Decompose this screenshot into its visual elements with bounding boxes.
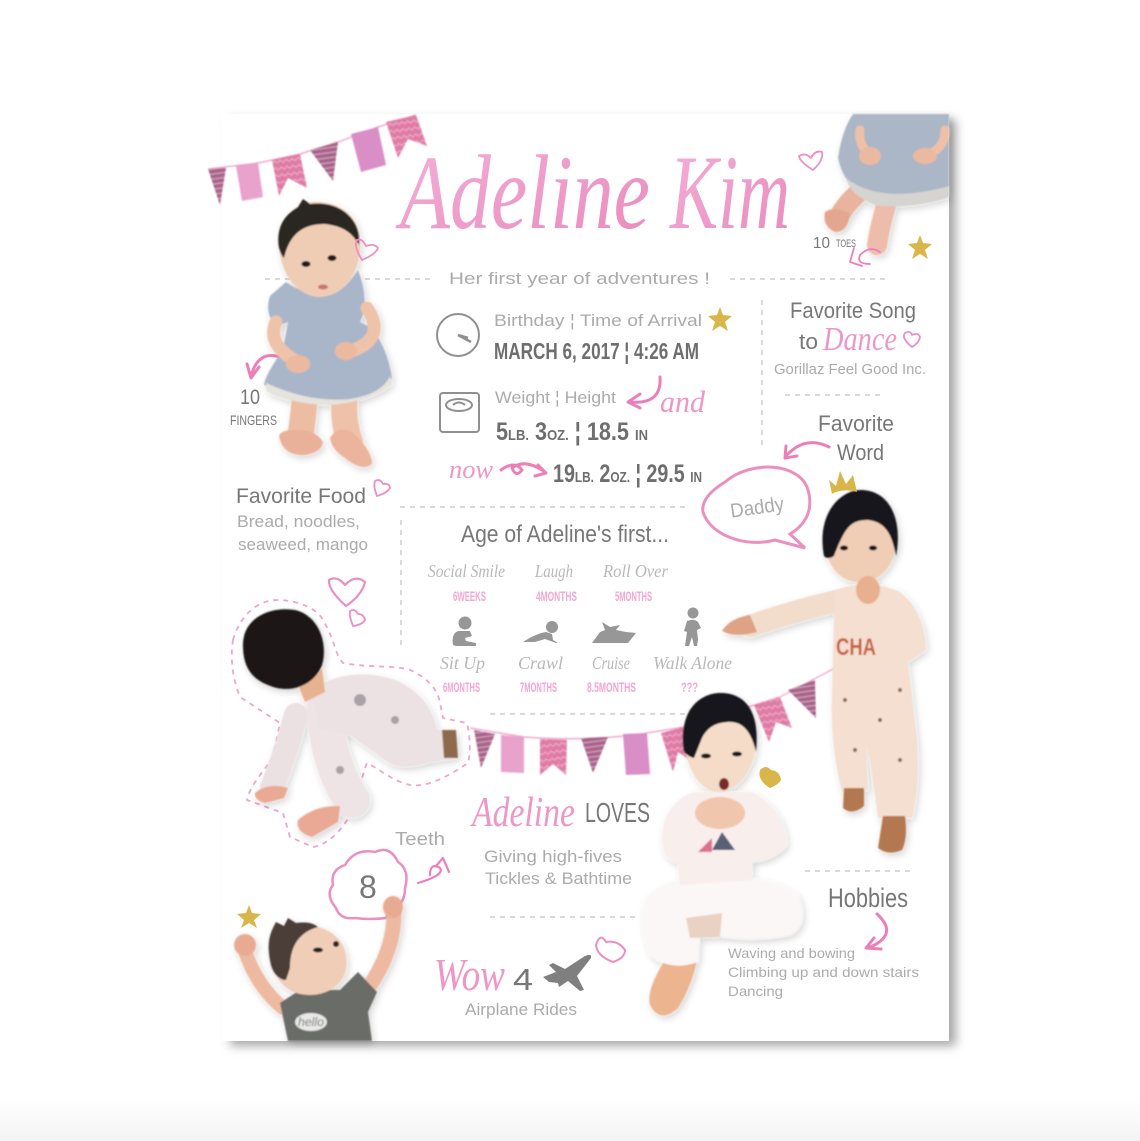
- icon: small heart left: [350, 610, 365, 626]
- favorite word: [818, 411, 894, 465]
- teeth cloud: 8: [359, 869, 377, 905]
- arrow: teeth: [418, 858, 449, 883]
- icon: heart food: [374, 480, 390, 496]
- hobbies list: [728, 945, 919, 999]
- arrow: to and: [628, 377, 660, 408]
- poster shadow: [230, 120, 956, 1046]
- title: Adeline: [395, 134, 650, 251]
- favorite song: Gorillaz Feel Good Inc.: [774, 361, 926, 378]
- milestones row 2: 8.5MONTHS: [587, 679, 636, 695]
- photo: baby with arms raised: [234, 896, 403, 1041]
- birth details: [494, 311, 702, 364]
- current weight: 19LB. 2OZ. ¦ 29.5 IN: [553, 460, 702, 488]
- adeline loves: LOVES: [585, 797, 650, 828]
- icon: scale: [440, 393, 479, 432]
- milestones row 1: Roll Over: [602, 561, 669, 581]
- arrow: fingers: [247, 356, 280, 378]
- photo: standing baby with crown: [722, 490, 926, 853]
- icon: sit up: [453, 616, 476, 646]
- poster sheet: [222, 114, 949, 1041]
- icon: gold star 1: [708, 307, 732, 331]
- weight details: [495, 388, 648, 446]
- subtitle: Her first year of adventures !: [449, 269, 710, 288]
- milestones row 2: 6MONTHS: [443, 679, 480, 695]
- milestones heading: Age of Adeline's first...: [461, 521, 669, 548]
- favorite song: to: [799, 329, 818, 354]
- milestones row 2: Cruise: [592, 653, 630, 673]
- icon: airplane: [543, 955, 591, 991]
- bottom fade: [0, 1100, 1140, 1141]
- hobbies list: Waving and bowing: [728, 945, 855, 961]
- favorite word: Word: [837, 440, 884, 465]
- milestones row 2: Sit Up: [440, 653, 485, 673]
- icon: heart wow: [596, 938, 625, 962]
- speech bubble: Daddy: [729, 493, 785, 523]
- teeth label: Teeth: [395, 829, 445, 849]
- loves text: [484, 847, 632, 888]
- favorite song: [774, 298, 926, 378]
- milestones row 2: [440, 653, 732, 695]
- photo: baby dress and toes top right: [824, 114, 949, 245]
- 10 fingers: FINGERS: [230, 412, 277, 428]
- icon: gold heart: [759, 767, 781, 788]
- milestones row 2: Crawl: [518, 653, 563, 673]
- adeline loves: Adeline: [470, 790, 575, 836]
- 10 toes: TOES: [836, 238, 856, 250]
- birth details: MARCH 6, 2017 ¦ 4:26 AM: [494, 338, 699, 364]
- milestones row 1: Social Smile: [428, 561, 505, 581]
- icon: clock: [437, 314, 479, 356]
- birth details: Birthday ¦ Time of Arrival: [494, 311, 702, 330]
- icon: crawl: [523, 621, 558, 643]
- hobbies list: Climbing up and down stairs: [728, 964, 919, 980]
- icon: gold crown: [829, 471, 857, 494]
- arrow: favorite word: [785, 443, 829, 458]
- favorite food: [236, 485, 368, 554]
- bunting: top left: [208, 115, 427, 205]
- favorite food: Bread, noodles,: [237, 512, 360, 531]
- airplane rides: Airplane Rides: [465, 1000, 577, 1019]
- arrow: hobbies: [866, 914, 887, 949]
- milestones row 1: 6WEEKS: [453, 588, 486, 604]
- wow 4: Wow: [434, 949, 505, 1000]
- hobbies heading: Hobbies: [828, 883, 908, 913]
- wow 4: 4: [513, 962, 533, 997]
- icon: gold star 2: [908, 235, 932, 259]
- weight details: 5LB. 3OZ. ¦ 18.5 IN: [496, 418, 648, 446]
- dashed cut line: [232, 600, 470, 847]
- weight details: Weight ¦ Height: [495, 388, 616, 407]
- favorite song: Dance: [822, 321, 897, 358]
- title: Kim: [669, 134, 790, 251]
- milestones row 2: ???: [681, 679, 698, 695]
- milestones row 1: Laugh: [534, 561, 573, 581]
- photo: crawling baby with dashed outline: [232, 600, 470, 847]
- speech bubble: [703, 467, 810, 548]
- icon: heart song: [904, 332, 920, 347]
- photo: sitting baby in white: [643, 693, 802, 1015]
- favorite song: Favorite Song: [790, 298, 916, 323]
- and: and: [660, 384, 705, 419]
- 10 fingers: 10: [240, 386, 260, 409]
- arrow: toes: [850, 248, 880, 266]
- baby figure: [243, 609, 458, 837]
- favorite food: seaweed, mango: [238, 535, 368, 554]
- teeth cloud: [330, 850, 406, 919]
- icon: walk alone: [684, 608, 701, 646]
- milestones row 1: [428, 561, 669, 604]
- arrow: now: [501, 464, 546, 476]
- hobbies list: Dancing: [728, 983, 783, 999]
- milestones row 2: Walk Alone: [653, 653, 732, 673]
- divider lines: [265, 279, 915, 917]
- loves text: Giving high-fives: [484, 847, 622, 866]
- loves text: Tickles & Bathtime: [485, 869, 632, 888]
- favorite food: Favorite Food: [236, 485, 366, 508]
- icon: heart near baby: [356, 240, 378, 260]
- photo: baby with arms raised: hello: [298, 1015, 324, 1029]
- icon: gold star 3: [237, 905, 261, 928]
- 10 toes: [813, 235, 856, 252]
- icon: heart top right: [799, 152, 822, 170]
- icon: cruise ship: [592, 622, 636, 643]
- icon: big heart left: [329, 578, 365, 606]
- photo: standing baby with crown: CHA: [836, 634, 876, 661]
- milestones row 1: 5MONTHS: [615, 588, 652, 604]
- bunting: bottom: [470, 668, 835, 775]
- milestones row 1: 4MONTHS: [536, 588, 577, 604]
- photo: sitting baby in blue dress: [264, 199, 392, 467]
- 10 toes: 10: [813, 235, 830, 252]
- favorite word: Favorite: [818, 411, 894, 436]
- milestones row 2: 7MONTHS: [520, 679, 557, 695]
- now: now: [449, 455, 494, 484]
- 10 fingers: [230, 386, 277, 428]
